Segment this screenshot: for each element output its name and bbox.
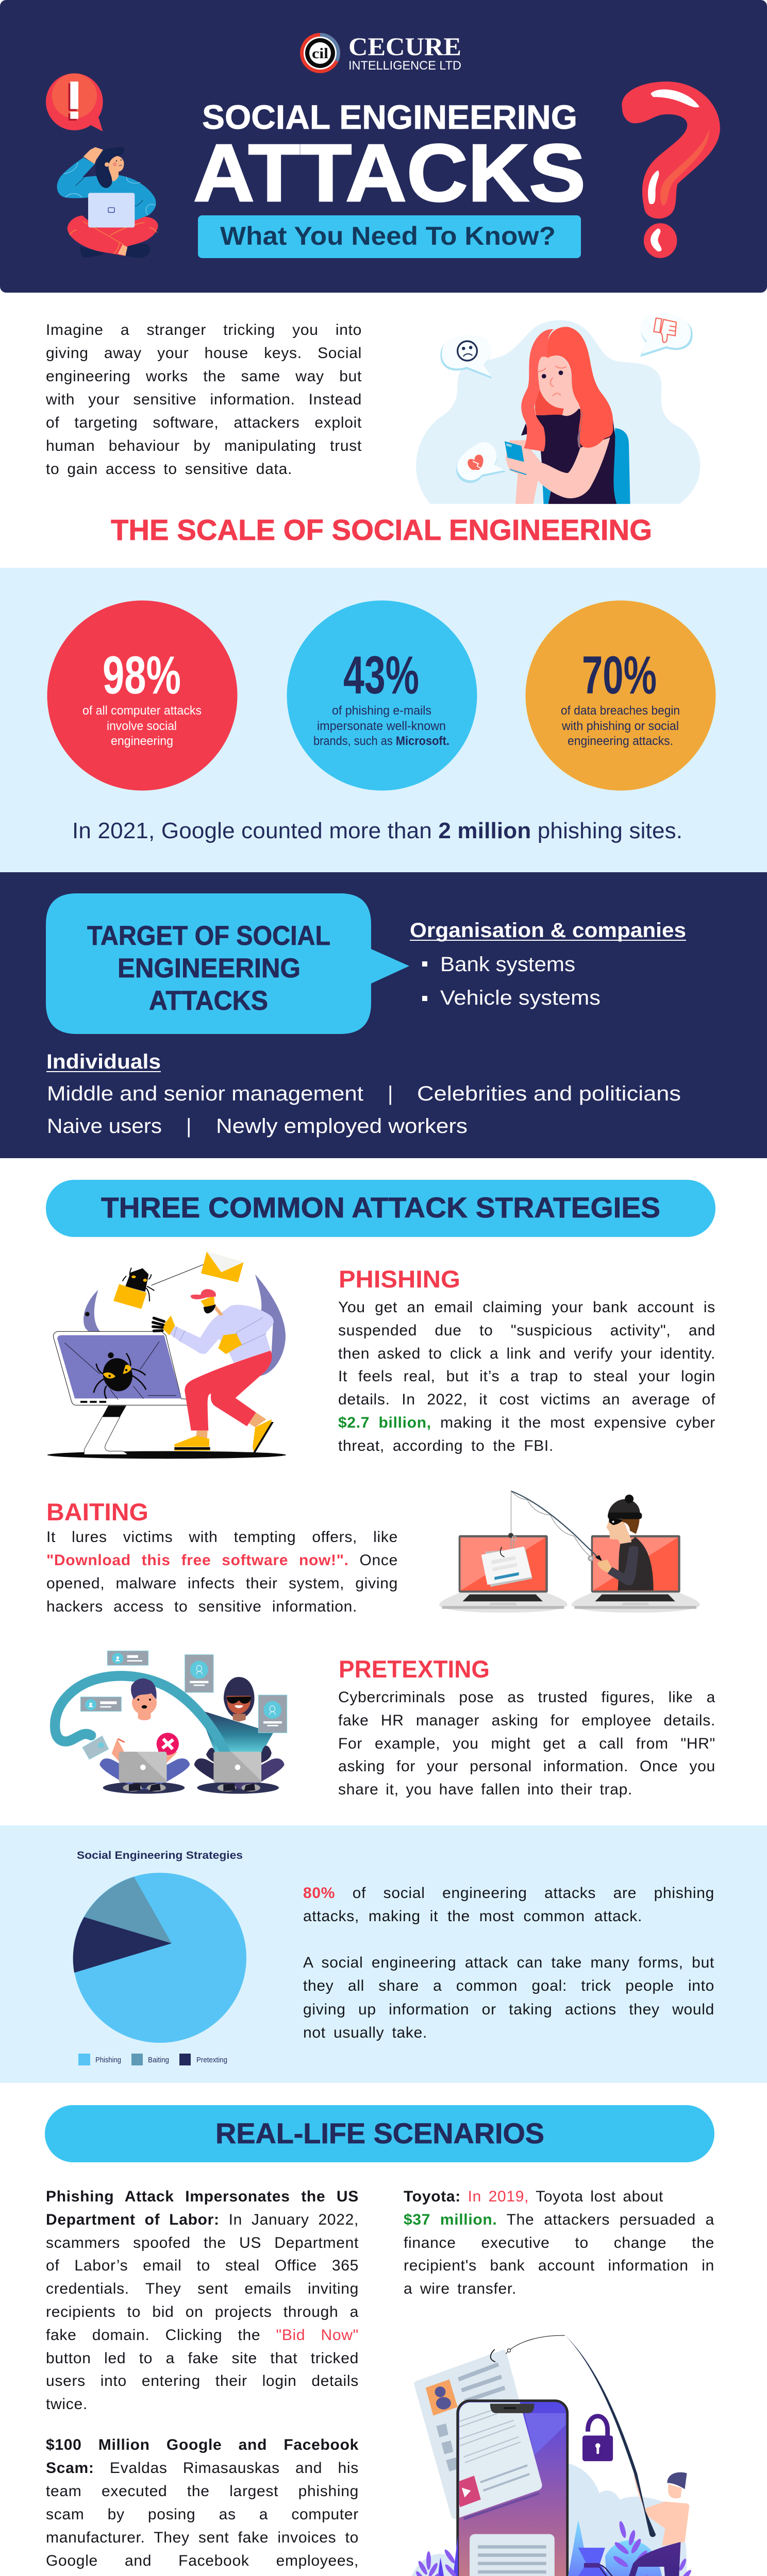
- text: phishing description: then asked to click a link and verify your identity.: [338, 1345, 715, 1362]
- text: toyota scenario: finance executive to change the: [404, 2234, 714, 2251]
- text: pretexting description: share it, you have fallen into their trap.: [338, 1781, 632, 1798]
- text: department of labor scenario: fake domain. Clicking the "Bid Now": [46, 2327, 359, 2344]
- list: organisation and companies: Organisation & companies: [410, 919, 686, 942]
- legend: Phishing: [95, 2056, 121, 2064]
- list: individuals: Naive users: [47, 1115, 162, 1138]
- text: 80 percent phishing: [303, 1885, 714, 1925]
- panel: strategies chart background: [0, 1825, 767, 2083]
- text: baiting description: opened, malware infects their system, giving: [46, 1575, 398, 1592]
- callout: target of social engineering attacks: ENGINEERING: [118, 953, 301, 984]
- heading: baiting: BAITING: [46, 1498, 148, 1526]
- text: department of labor scenario: of Labor’s email to steal Office 365: [46, 2257, 359, 2274]
- heading: three common attack strategies: THREE COMMON ATTACK STRATEGIES: [101, 1191, 660, 1224]
- text: google and facebook scenario: [46, 2436, 359, 2576]
- text: common goal: they all share a common goal: trick people into: [303, 1977, 714, 1994]
- logo: Cecure Intelligence: INTELLIGENCE LTD: [348, 59, 461, 73]
- stat: 70 percent: engineering attacks.: [568, 734, 673, 748]
- illustration: sad woman looking at phone with speech bubbles: [416, 313, 700, 504]
- heading: real-life scenarios: [45, 2105, 714, 2162]
- text: google and facebook scenario: Google and Facebook employees,: [46, 2552, 359, 2569]
- text: pretexting description: [338, 1689, 715, 1798]
- stat: 43 percent: of phishing e-mails: [332, 704, 431, 718]
- list: individuals: |: [186, 1115, 191, 1138]
- text: department of labor scenario: [46, 2188, 359, 2413]
- stat: 98 percent: of all computer attacks: [82, 704, 202, 718]
- text: phishing description: suspended due to "suspicious activity", and: [338, 1322, 715, 1339]
- text: toyota scenario: [404, 2188, 714, 2297]
- chart: social engineering strategies pie: Social Engineering Strategies: [77, 1850, 243, 1861]
- text: intro paragraph: Imagine a stranger tricking you into: [46, 321, 362, 338]
- callout: target of social engineering attacks: [46, 893, 409, 1034]
- text: pretexting description: asking for your personal information. Once you: [338, 1758, 715, 1775]
- stat: 70 percent: with phishing or social: [561, 719, 679, 733]
- text: intro paragraph: giving away your house keys. Social: [46, 345, 362, 362]
- text: google and facebook scenario: $100 Million Google and Facebook: [46, 2436, 359, 2453]
- legend: Baiting: [148, 2056, 169, 2064]
- stat: 98 percent: engineering: [111, 734, 173, 748]
- panel: target of attacks: [0, 872, 767, 1158]
- stat: 98 percent: [47, 601, 237, 790]
- list: organisation and companies: Bank systems: [440, 953, 575, 976]
- text: phishing description: details. In 2022, it cost victims an average of: [338, 1391, 715, 1408]
- stat: 70 percent: of data breaches begin: [561, 704, 680, 718]
- stat: 98 percent: 98%: [103, 646, 181, 705]
- list: individuals: [46, 1050, 681, 1138]
- text: pretexting description: fake HR manager asking for employee details.: [338, 1712, 715, 1729]
- icon: red question mark: [622, 81, 720, 258]
- panel: statistics: [0, 568, 767, 872]
- list: individuals: Individuals: [46, 1050, 161, 1073]
- list: individuals: Newly employed workers: [216, 1115, 468, 1138]
- stat: 43 percent: brands, such as Microsoft.: [313, 734, 449, 748]
- text: intro paragraph: human behaviour by manipulating trust: [46, 437, 362, 454]
- text: common goal: [303, 1954, 714, 2041]
- text: intro paragraph: engineering works the same way but: [46, 368, 362, 385]
- logo: Cecure Intelligence: [300, 32, 461, 73]
- text: department of labor scenario: recipients to bid on projects through a: [46, 2303, 359, 2320]
- text: phishing description: It feels real, but it’s a trap to steal your login: [338, 1368, 715, 1385]
- heading: the scale of social engineering: THE SCALE OF SOCIAL ENGINEERING: [111, 514, 652, 547]
- chart: social engineering strategies pie: [73, 1850, 246, 2065]
- legend: Pretexting: [196, 2056, 227, 2064]
- text: common goal: giving up information or taking actions they would: [303, 2001, 714, 2018]
- text: google and facebook scenario: scam by posing as a computer: [46, 2506, 359, 2523]
- heading: phishing: PHISHING: [339, 1265, 460, 1293]
- logo: Cecure Intelligence: CECURE: [348, 32, 461, 61]
- text: department of labor scenario: twice.: [46, 2396, 88, 2413]
- text: intro paragraph: with your sensitive information. Instead: [46, 391, 362, 408]
- text: department of labor scenario: scammers spoofed the US Department: [46, 2234, 359, 2251]
- callout: target of social engineering attacks: ATTACKS: [149, 986, 268, 1016]
- stat: 43 percent: 43%: [343, 646, 419, 705]
- text: intro paragraph: to gain access to sensitive data.: [46, 461, 292, 478]
- text: department of labor scenario: Department of Labor: In January 2022,: [46, 2211, 359, 2228]
- text: pretexting description: For example, you might get a call from "HR": [338, 1735, 715, 1752]
- text: department of labor scenario: button led to a fake site that tricked: [46, 2350, 359, 2367]
- text: phishing description: You get an email claiming your bank account is: [338, 1299, 715, 1316]
- text: baiting description: hackers access to sensitive information.: [46, 1598, 357, 1615]
- subtitle: what you need to know: [198, 215, 581, 258]
- text: 80 percent phishing: 80% of social engineering attacks are phishing: [303, 1885, 714, 1902]
- stat: 70 percent: [526, 601, 715, 790]
- panel: header banner: [0, 0, 767, 293]
- text: common goal: not usually take.: [303, 2024, 427, 2041]
- heading: real-life scenarios: REAL-LIFE SCENARIOS: [215, 2117, 544, 2149]
- text: common goal: A social engineering attack can take many forms, but: [303, 1954, 714, 1971]
- text: intro paragraph: [46, 321, 362, 478]
- text: toyota scenario: $37 million. The attackers persuaded a: [404, 2211, 714, 2228]
- icon: exclamation speech bubble and worried woman with laptop: [46, 73, 158, 258]
- text: google phishing sites: In 2021, Google counted more than 2 million phishing sites.: [72, 818, 682, 843]
- text: baiting description: "Download this free software now!". Once: [46, 1552, 398, 1569]
- heading: pretexting: PRETEXTING: [339, 1655, 490, 1683]
- illustration: pretexting victim and hooded hacker: [55, 1651, 287, 1794]
- list: organisation and companies: [410, 919, 686, 1009]
- text: department of labor scenario: credentials. They sent emails inviting: [46, 2280, 359, 2297]
- list: individuals: |: [388, 1082, 393, 1105]
- stat: 43 percent: [287, 601, 477, 790]
- title: social engineering attacks: SOCIAL ENGINEERING: [202, 98, 577, 136]
- list: individuals: Middle and senior management: [47, 1082, 363, 1105]
- text: intro paragraph: of targeting software, attackers exploit: [46, 414, 362, 431]
- text: phishing description: [338, 1299, 715, 1454]
- text: google and facebook scenario: Scam: Evaldas Rimasauskas and his: [46, 2460, 359, 2477]
- text: phishing description: threat, according to the FBI.: [338, 1437, 554, 1454]
- text: phishing description: $2.7 billion, making it the most expensive cyber: [338, 1414, 715, 1431]
- text: google and facebook scenario: team executed the largest phishing: [46, 2483, 359, 2500]
- legend: [78, 2054, 227, 2065]
- stat: 98 percent: involve social: [107, 719, 177, 733]
- callout: target of social engineering attacks: TARGET OF SOCIAL: [87, 921, 330, 951]
- stat: 43 percent: impersonate well-known: [317, 719, 446, 733]
- text: google and facebook scenario: manufacturer. They sent fake invoices to: [46, 2529, 359, 2546]
- illustration: phishing hacker with monitor and bug: [47, 1251, 286, 1459]
- subtitle: what you need to know: What You Need To Know?: [220, 222, 556, 250]
- text: pretexting description: Cybercriminals pose as trusted figures, like a: [338, 1689, 715, 1706]
- text: toyota scenario: Toyota: In 2019, Toyota lost about: [404, 2188, 663, 2205]
- list: individuals: Celebrities and politicians: [417, 1082, 681, 1105]
- text: toyota scenario: recipient's bank account information in: [404, 2257, 714, 2274]
- text: department of labor scenario: Phishing Attack Impersonates the US: [46, 2188, 359, 2205]
- illustration: fishing rod thief with laptops: [439, 1491, 700, 1613]
- text: baiting description: It lures victims with tempting offers, like: [46, 1529, 398, 1546]
- text: department of labor scenario: users into entering their login details: [46, 2372, 359, 2389]
- heading: three common attack strategies: [46, 1180, 715, 1237]
- text: 80 percent phishing: attacks, making it the most common attack.: [303, 1907, 642, 1925]
- list: organisation and companies: Vehicle systems: [440, 987, 601, 1009]
- stat: 70 percent: 70%: [582, 646, 657, 705]
- illustration: phone phishing with fishing man and money bag: [411, 2335, 691, 2576]
- logo: Cecure Intelligence: cil: [312, 45, 328, 62]
- text: toyota scenario: a wire transfer.: [404, 2280, 516, 2297]
- text: baiting description: [46, 1529, 398, 1615]
- title: social engineering attacks: ATTACKS: [193, 128, 586, 218]
